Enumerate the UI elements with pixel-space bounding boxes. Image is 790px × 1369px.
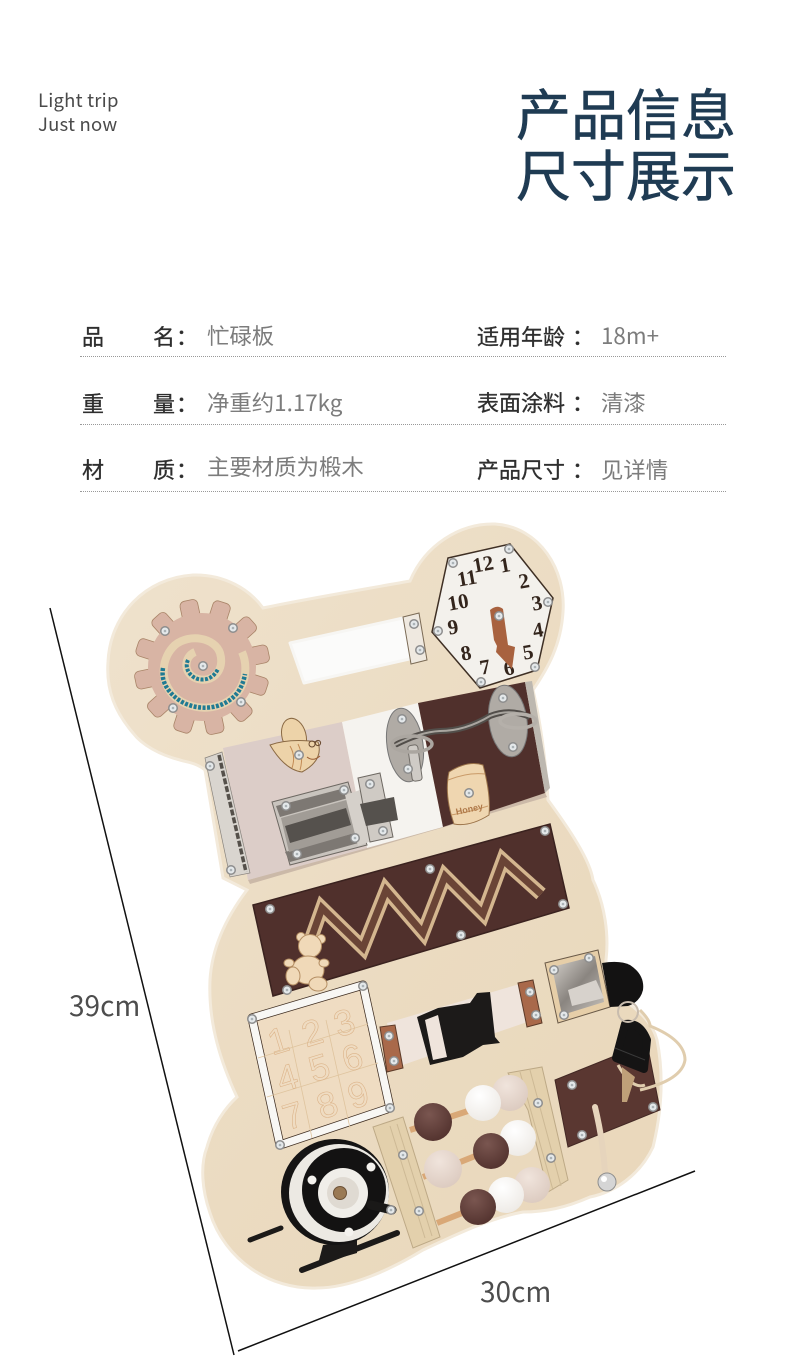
bear-shaped wooden board xyxy=(108,524,661,1288)
spec table: 质： xyxy=(153,453,198,485)
number sliding puzzle: 1 xyxy=(263,1018,294,1063)
honey barrel: Honey xyxy=(455,801,484,817)
clock face: 8 xyxy=(459,640,473,666)
clock face: 5 xyxy=(521,639,535,665)
height label: 39cm xyxy=(69,985,140,1025)
honey barrel xyxy=(447,764,489,825)
spare key xyxy=(615,1002,647,1102)
clock face: 1 xyxy=(498,552,512,578)
brand tagline xyxy=(38,87,119,137)
reel handle xyxy=(371,1205,392,1210)
black key head xyxy=(602,962,643,1007)
clock face: 12 xyxy=(471,550,495,578)
bee xyxy=(270,716,321,772)
number sliding puzzle: 8 xyxy=(312,1082,343,1127)
bear charm xyxy=(284,932,329,991)
spec table: 量： xyxy=(153,387,198,419)
spinning reel xyxy=(250,1139,397,1270)
spec table: 主要材质为椴木 xyxy=(207,450,364,482)
rope with bell xyxy=(595,1107,616,1191)
spec table: 清漆 xyxy=(601,386,646,418)
spec table: 表面涂料 ： xyxy=(477,386,594,418)
number sliding puzzle xyxy=(247,981,395,1150)
clock face: 9 xyxy=(446,614,460,640)
slide bolt latch xyxy=(272,773,398,865)
title xyxy=(516,71,736,212)
clock face: 6 xyxy=(502,655,516,681)
buckle strap xyxy=(380,980,542,1072)
height dimension line xyxy=(50,608,234,1355)
left hinge xyxy=(205,752,250,877)
width label: 30cm xyxy=(480,1271,551,1311)
spec table: 忙碌板 xyxy=(207,319,274,351)
rope loop xyxy=(618,1010,685,1090)
brand tagline: Light trip xyxy=(38,87,119,113)
cam lock and key xyxy=(545,950,643,1023)
clock face: 7 xyxy=(478,654,492,680)
velcro strap xyxy=(290,613,427,683)
spec table: 净重约1.17kg xyxy=(207,386,342,418)
spec table: 重 xyxy=(82,387,104,419)
spec table: 品 xyxy=(82,320,104,352)
black buckle xyxy=(417,992,500,1065)
spec table: 材 xyxy=(82,453,104,485)
number sliding puzzle: 6 xyxy=(337,1035,368,1080)
hinged door panel xyxy=(205,681,550,884)
brown pad xyxy=(555,1043,660,1147)
number sliding puzzle: 3 xyxy=(329,1000,360,1045)
spec table: 产品尺寸 ： xyxy=(477,453,594,485)
abacus xyxy=(373,1067,568,1248)
spec table xyxy=(80,319,726,492)
brand tagline: Just now xyxy=(38,111,117,137)
number sliding puzzle: 7 xyxy=(278,1093,309,1138)
clock face: 3 xyxy=(530,590,544,616)
spec table: 见详情 xyxy=(601,453,668,485)
title: 尺寸展示 xyxy=(516,132,736,212)
clock face: 2 xyxy=(517,568,531,594)
number sliding puzzle: 9 xyxy=(343,1072,374,1117)
title: 产品信息 xyxy=(516,71,736,151)
gear with bead spiral xyxy=(121,586,283,748)
clock face xyxy=(432,544,553,688)
hook and eye xyxy=(382,683,536,784)
zigzag lacing panel xyxy=(253,824,569,996)
clock face: 11 xyxy=(455,564,479,592)
spec table: 适用年龄 ： xyxy=(477,320,594,352)
spec table: 名： xyxy=(153,320,198,352)
right hinge xyxy=(525,681,550,793)
clock hand xyxy=(490,607,515,669)
number sliding puzzle: 4 xyxy=(272,1055,303,1100)
clock face: 4 xyxy=(531,617,546,643)
number sliding puzzle: 2 xyxy=(297,1010,328,1055)
clock face: 10 xyxy=(446,588,470,616)
width dimension line xyxy=(238,1171,695,1351)
spec table: 18m+ xyxy=(601,319,659,351)
number sliding puzzle: 5 xyxy=(304,1045,335,1090)
